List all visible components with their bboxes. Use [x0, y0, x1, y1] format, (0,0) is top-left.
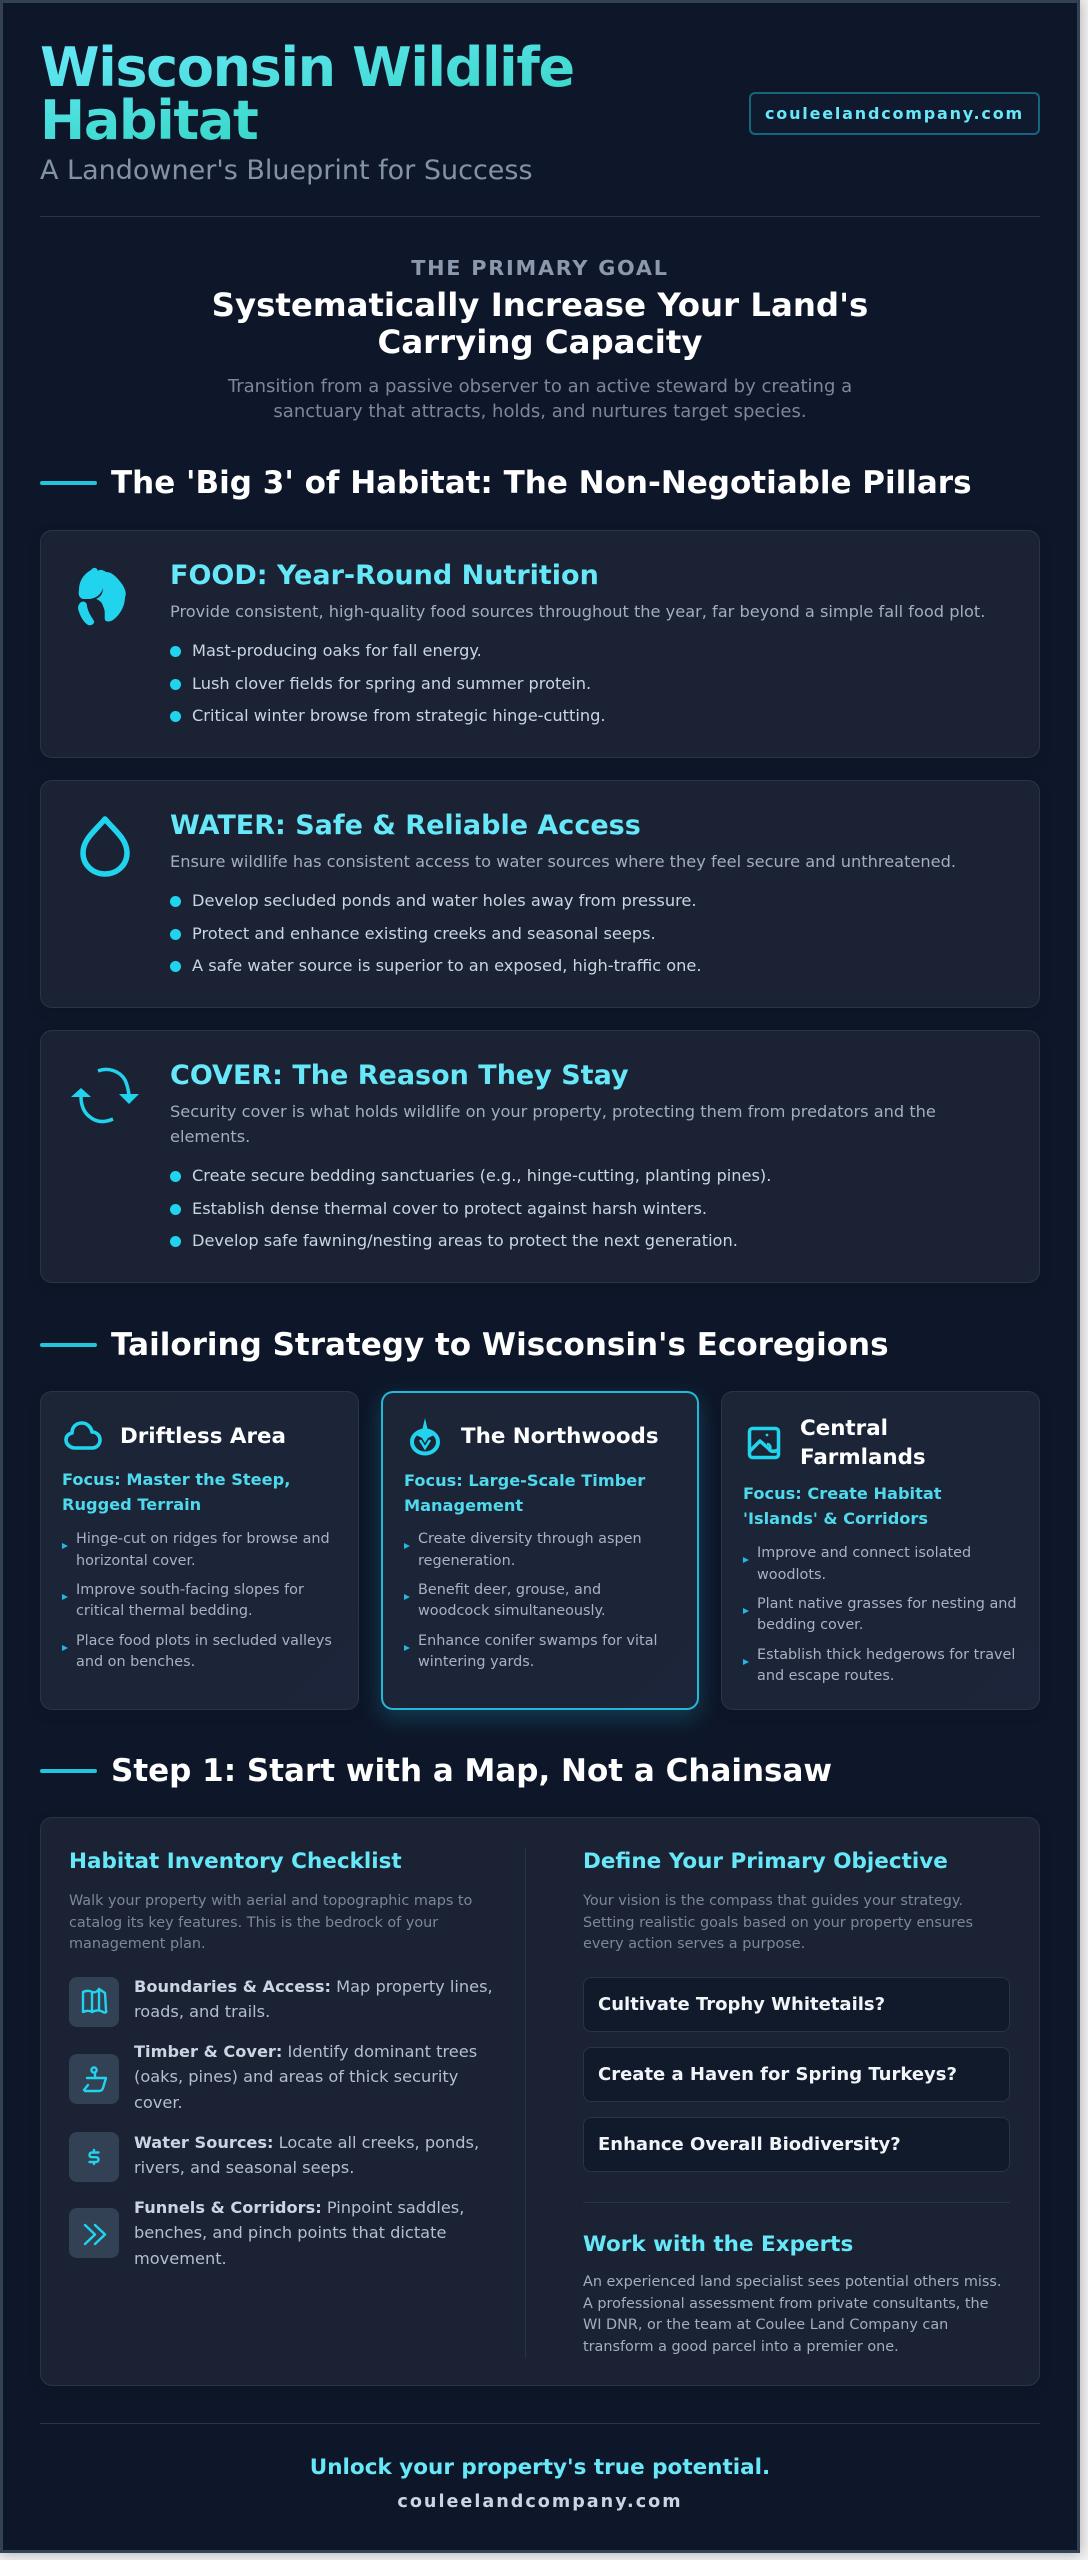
goal description: Transition from a passive observer to an active steward by creating a	[228, 376, 852, 397]
header subtitle: A Landowner's Blueprint for Success	[40, 155, 533, 186]
northwoods focus: Focus: Large-Scale Timber	[404, 1470, 645, 1490]
website badge: couleelandcompany.com	[765, 104, 1024, 123]
northwoods bullets: regeneration.	[418, 1553, 515, 1569]
cover bullets: Develop safe fawning/nesting areas to protect the next generation.	[192, 1231, 738, 1250]
farmlands focus: 'Islands' & Corridors	[743, 1508, 928, 1528]
footer call to action: Unlock your property's true potential.	[310, 2455, 770, 2480]
goal description: sanctuary that attracts, holds, and nurtures target species.	[273, 401, 807, 422]
footer	[310, 2455, 770, 2512]
boundaries text: roads, and trails.	[134, 2002, 270, 2021]
objective option: turkeys: Create a Haven for Spring Turkeys?	[598, 2064, 957, 2085]
timber text	[134, 2042, 477, 2112]
experts text: transform a good parcel into a premier one.	[583, 2339, 899, 2355]
farmlands bullets: woodlots.	[757, 1567, 826, 1583]
water description: Ensure wildlife has consistent access to water sources where they feel secure and unthreatened.	[170, 852, 956, 871]
goal eyebrow: THE PRIMARY GOAL	[411, 256, 669, 280]
experts heading: Work with the Experts	[583, 2232, 853, 2257]
icon: map	[69, 1977, 119, 2027]
goal headline: Systematically Increase Your Land's	[212, 286, 868, 324]
food bullets	[170, 641, 606, 725]
checklist intro: management plan.	[69, 1936, 206, 1952]
boundaries text	[134, 1977, 493, 2021]
objective option: turkeys	[583, 2047, 1010, 2102]
panel: driftless area	[40, 1391, 359, 1710]
objective heading: Define Your Primary Objective	[583, 1849, 948, 1874]
checklist item: timber	[69, 2042, 477, 2112]
farmlands bullets	[743, 1545, 1017, 1684]
icon: landscape image	[748, 1426, 780, 1460]
footer website: couleelandcompany.com	[397, 2492, 683, 2512]
goal headline	[212, 286, 868, 361]
cover bullets: Create secure bedding sanctuaries (e.g., hinge-cutting, planting pines).	[192, 1166, 771, 1185]
objective intro: every action serves a purpose.	[583, 1936, 805, 1952]
checklist intro: catalog its key features. This is the bedrock of your	[69, 1915, 438, 1931]
icon: water drop	[80, 816, 130, 877]
header title	[40, 40, 600, 150]
boundaries text: Boundaries & Access: Map property lines,	[134, 1977, 493, 1996]
objective intro: Setting realistic goals based on your property ensures	[583, 1915, 973, 1931]
funnels text: Funnels & Corridors: Pinpoint saddles,	[134, 2198, 464, 2217]
timber text: (oaks, pines) and areas of thick security	[134, 2067, 458, 2086]
panel: food	[40, 530, 1040, 758]
objective intro	[583, 1893, 973, 1952]
icon: northwoods	[410, 1418, 440, 1456]
experts text: An experienced land specialist sees potential others miss.	[583, 2274, 1001, 2290]
cover bullets	[170, 1166, 771, 1250]
objective option: biodiversity	[583, 2117, 1010, 2172]
section heading: step 1: Step 1: Start with a Map, Not a Chainsaw	[111, 1753, 832, 1789]
checklist heading: Habitat Inventory Checklist	[69, 1849, 402, 1874]
icon: timber	[69, 2054, 119, 2104]
icon: cloud	[64, 1421, 102, 1450]
northwoods bullets: Enhance conifer swamps for vital	[418, 1633, 658, 1649]
food bullets: Critical winter browse from strategic hinge-cutting.	[192, 706, 606, 725]
goal headline: Carrying Capacity	[378, 323, 702, 361]
farmlands bullets: Improve and connect isolated	[757, 1545, 971, 1561]
experts text: WI DNR, or the team at Coulee Land Company can	[583, 2317, 948, 2333]
cover description: elements.	[170, 1127, 250, 1146]
northwoods focus	[404, 1470, 646, 1514]
checklist item: funnels	[69, 2198, 464, 2268]
goal description	[228, 376, 852, 422]
food bullets: Lush clover fields for spring and summer protein.	[192, 674, 591, 692]
cover bullets: Establish dense thermal cover to protect against harsh winters.	[192, 1198, 707, 1218]
cover description: Security cover is what holds wildlife on your property, protecting them from predators and the	[170, 1102, 936, 1121]
timber text: cover.	[134, 2093, 183, 2112]
northwoods bullets	[404, 1531, 658, 1670]
panel: central farmlands	[721, 1391, 1040, 1710]
objective option: biodiversity: Enhance Overall Biodiversity?	[598, 2134, 901, 2155]
section heading: ecoregions: Tailoring Strategy to Wisconsin's Ecoregions	[111, 1327, 889, 1363]
driftless bullets: critical thermal bedding.	[76, 1603, 253, 1619]
panel: cover	[40, 1030, 1040, 1283]
food bullets: Mast-producing oaks for fall energy.	[192, 641, 482, 660]
driftless title: Driftless Area	[120, 1424, 286, 1449]
northwoods bullets: Benefit deer, grouse, and	[418, 1582, 601, 1598]
experts text	[583, 2274, 1001, 2355]
funnels text: movement.	[134, 2249, 227, 2268]
panel: the northwoods	[381, 1391, 699, 1710]
driftless bullets: Place food plots in secluded valleys	[76, 1633, 332, 1649]
header title: Habitat	[40, 88, 257, 152]
food title: FOOD: Year-Round Nutrition	[170, 560, 599, 591]
driftless bullets: Hinge-cut on ridges for browse and	[76, 1531, 330, 1547]
water title: WATER: Safe & Reliable Access	[170, 810, 641, 841]
driftless focus: Rugged Terrain	[62, 1494, 201, 1514]
section heading: big 3: The 'Big 3' of Habitat: The Non-Negotiable Pillars	[111, 465, 972, 501]
checklist intro: Walk your property with aerial and topographic maps to	[69, 1893, 472, 1909]
farmlands title: Central	[800, 1416, 888, 1440]
panel: water	[40, 780, 1040, 1008]
timber text: Timber & Cover: Identify dominant trees	[134, 2042, 477, 2061]
icon: food	[78, 568, 126, 626]
cover description	[170, 1102, 936, 1146]
water bullets: Protect and enhance existing creeks and seasonal seeps.	[192, 924, 656, 942]
driftless focus: Focus: Master the Steep,	[62, 1470, 290, 1488]
water bullets: Develop secluded ponds and water holes away from pressure.	[192, 891, 697, 910]
driftless bullets: and on benches.	[76, 1654, 195, 1670]
farmlands bullets: and escape routes.	[757, 1668, 894, 1684]
farmlands bullets: bedding cover.	[757, 1617, 863, 1633]
objective option: whitetails	[583, 1977, 1010, 2032]
icon: chevrons	[69, 2208, 119, 2258]
icon: cover arrows	[71, 1068, 139, 1124]
experts text: A professional assessment from private consultants, the	[583, 2296, 989, 2312]
objective intro: Your vision is the compass that guides your strategy.	[583, 1893, 963, 1909]
northwoods bullets: Create diversity through aspen	[418, 1531, 642, 1547]
cover title: COVER: The Reason They Stay	[170, 1060, 629, 1091]
panel: step 1	[40, 1817, 1040, 2386]
driftless bullets: Improve south-facing slopes for	[76, 1582, 304, 1598]
funnels text	[134, 2198, 464, 2268]
northwoods bullets: wintering yards.	[418, 1654, 534, 1670]
water bullets	[170, 891, 702, 975]
funnels text: benches, and pinch points that dictate	[134, 2223, 446, 2242]
driftless focus	[62, 1470, 290, 1514]
checklist item: boundaries	[69, 1977, 493, 2027]
water bullets: A safe water source is superior to an exposed, high-traffic one.	[192, 956, 702, 975]
objective option: whitetails: Cultivate Trophy Whitetails?	[598, 1994, 885, 2015]
driftless bullets	[62, 1531, 332, 1670]
farmlands bullets: Plant native grasses for nesting and	[757, 1596, 1017, 1612]
checklist item: water sources	[69, 2132, 479, 2182]
checklist intro	[69, 1893, 472, 1952]
water sources text	[134, 2133, 479, 2177]
northwoods bullets: woodcock simultaneously.	[418, 1603, 606, 1619]
farmlands bullets: Establish thick hedgerows for travel	[757, 1647, 1015, 1663]
farmlands title: Farmlands	[800, 1444, 926, 1470]
northwoods title: The Northwoods	[461, 1424, 659, 1449]
farmlands focus: Focus: Create Habitat	[743, 1484, 942, 1502]
farmlands title	[800, 1416, 926, 1470]
water sources text: Water Sources: Locate all creeks, ponds,	[134, 2133, 479, 2152]
water sources text: rivers, and seasonal seeps.	[134, 2158, 354, 2177]
northwoods focus: Management	[404, 1496, 523, 1514]
food description: Provide consistent, high-quality food sources throughout the year, far beyond a simple fall food plot.	[170, 602, 985, 621]
driftless bullets: horizontal cover.	[76, 1553, 196, 1569]
icon: water source symbol	[69, 2132, 119, 2182]
website badge	[749, 92, 1040, 135]
farmlands focus	[743, 1484, 942, 1528]
header title: Wisconsin Wildlife	[40, 36, 574, 98]
primary goal block	[212, 256, 868, 422]
